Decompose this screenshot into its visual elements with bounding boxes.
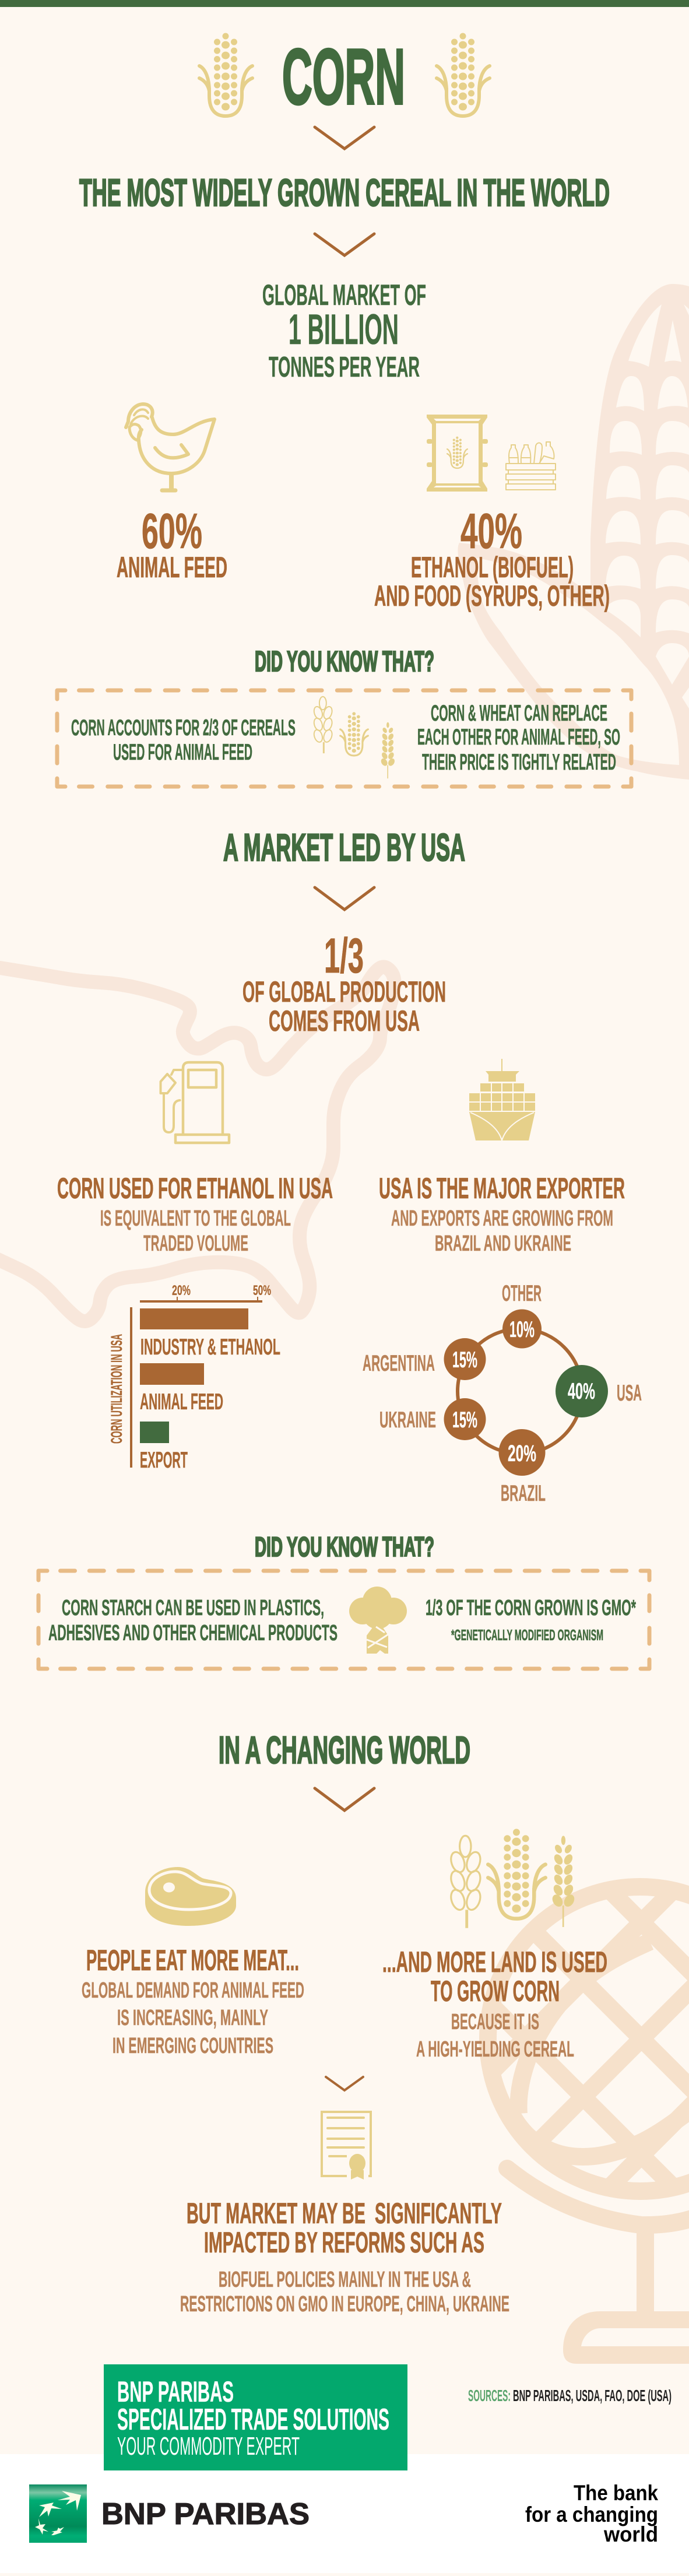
panel: specialized trade solutions [104,2364,407,2470]
stat: 40% ethanol and food: 40% [460,504,522,559]
chart: exporters ring: 20% [508,1441,536,1466]
text: USA major exporter: BRAZIL AND UKRAINE [435,1231,571,1256]
icon: steak [145,1867,236,1926]
text: people eat more meat: PEOPLE EAT MORE MEAT... [86,1944,299,1977]
background: globe [479,1878,689,2364]
text: reforms: BIOFUEL POLICIES MAINLY IN THE USA & [219,2268,471,2292]
stat: 40% ethanol and food [374,504,610,612]
chart: exporters ring: BRAZIL [501,1481,546,1506]
panel: did you know 2: CORN STARCH CAN BE USED IN PLASTICS, [62,1596,324,1620]
chart: exporters ring: UKRAINE [379,1408,436,1433]
background: large corn [458,284,689,780]
panel: did you know 1 [57,690,631,787]
panel: specialized trade solutions: YOUR COMMODITY EXPERT [117,2432,300,2461]
text: more land used [382,1946,607,2062]
panel: did you know 2 [38,1571,649,1669]
arrow small [326,2077,363,2090]
stat: 1/3: OF GLOBAL PRODUCTION [242,975,446,1008]
text: people eat more meat: GLOBAL DEMAND FOR ANIMAL FEED [82,1978,304,2003]
text: corn used for ethanol: IS EQUIVALENT TO THE GLOBAL [100,1206,291,1231]
panel: specialized trade solutions: BNP PARIBAS [117,2375,234,2408]
title: CORN [282,33,405,121]
global market text [262,279,426,383]
icon: fuel pump [161,1062,229,1143]
icon: GMO tree [349,1587,407,1654]
chart: exporters ring: ARGENTINA [363,1351,435,1376]
icon: container ship [469,1059,535,1140]
logo: BNP Paribas emblem [29,2484,87,2543]
bar chart: corn utilization in USA: ANIMAL FEED [140,1389,223,1415]
icon: food crate [506,442,556,490]
heading: in a changing world: IN A CHANGING WORLD [219,1728,470,1771]
stat: 60% animal feed: 60% [142,504,202,559]
arrow [315,127,374,149]
sources: SOURCES: [468,2387,511,2405]
text: reforms: IMPACTED BY REFORMS SUCH AS [204,2226,484,2259]
chart: exporters ring: 15% [452,1347,477,1373]
bar chart: corn utilization in USA: INDUSTRY & ETHANOL [140,1335,280,1360]
panel: did you know 1: USED FOR ANIMAL FEED [113,740,252,765]
stat: 60% animal feed: ANIMAL FEED [117,551,227,584]
bar chart: corn utilization in USA: 50% [253,1283,271,1298]
global market text: TONNES PER YEAR [269,352,420,383]
text: people eat more meat [82,1944,304,2058]
slogan: for a changing [525,2503,658,2526]
slogan [525,2481,658,2546]
text: corn used for ethanol [57,1172,333,1256]
icon: certificate [322,2112,371,2180]
chart: exporters ring: USA [617,1381,642,1406]
chart: exporters ring: OTHER [502,1281,542,1306]
slogan: The bank [574,2481,658,2505]
stat: 1/3: 1/3 [324,928,364,983]
text: more land used: TO GROW CORN [431,1975,560,2008]
text: reforms [180,2197,509,2317]
text: USA major exporter [379,1172,625,1256]
global market text: 1 BILLION [289,306,399,353]
top bar [0,0,689,7]
stat: 1/3: COMES FROM USA [269,1005,420,1037]
logo: BNP Paribas wordmark: BNP PARIBAS [101,2497,310,2531]
chart: exporters ring: 15% [452,1408,477,1433]
bar chart: corn utilization in USA [108,1283,280,1473]
text: people eat more meat: IN EMERGING COUNTRIES [113,2034,273,2058]
stat: 1/3 [242,928,446,1037]
heading: market led by USA: A MARKET LED BY USA [223,826,465,869]
arrow [315,887,374,910]
arrow [315,1788,374,1810]
background: USA map outline [0,967,395,1321]
chart: exporters ring: 40% [568,1379,595,1404]
slogan: world [603,2522,658,2546]
chart: exporters ring: 10% [509,1317,535,1342]
panel: specialized trade solutions: SPECIALIZED TRADE SOLUTIONS [117,2403,389,2437]
stat: 60% animal feed [117,504,227,584]
chart: exporters ring [363,1281,642,1506]
heading: did you know: DID YOU KNOW THAT? [255,646,434,678]
text: corn used for ethanol: CORN USED FOR ETHANOL IN USA [57,1172,333,1205]
panel: did you know 2: ADHESIVES AND OTHER CHEMICAL PRODUCTS [48,1621,338,1645]
icon: ethanol bag [427,415,488,492]
text: people eat more meat: IS INCREASING, MAINLY [117,2006,268,2030]
bar chart: corn utilization in USA: EXPORT [140,1448,188,1473]
global market text: GLOBAL MARKET OF [262,279,426,311]
icon: chicken [126,404,215,490]
text: more land used: BECAUSE IT IS [451,2010,539,2034]
text: corn used for ethanol: TRADED VOLUME [143,1231,248,1256]
icon: wheat and corn [449,1829,576,1928]
heading: did you know 2: DID YOU KNOW THAT? [255,1531,434,1562]
arrow [315,234,374,255]
bar chart: corn utilization in USA: CORN UTILIZATION IN USA [108,1334,125,1444]
footer white band [0,2454,689,2573]
icon: corn left [199,33,252,116]
icon: corn right [437,33,490,116]
bar chart: corn utilization in USA: 20% [172,1283,191,1298]
panel: did you know 1: CORN ACCOUNTS FOR 2/3 OF CEREALS [71,715,296,740]
